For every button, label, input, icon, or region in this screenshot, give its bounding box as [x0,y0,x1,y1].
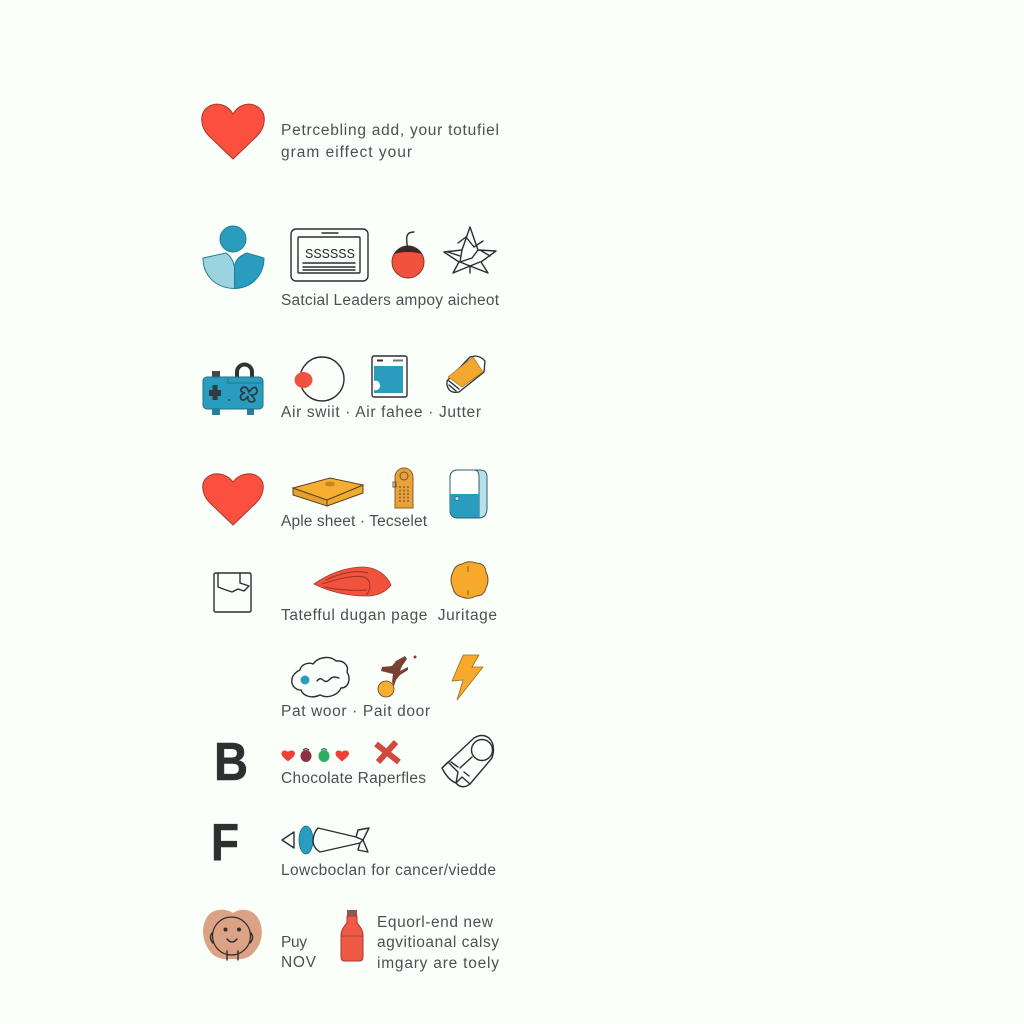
icon: circle with red dot [294,357,344,401]
caption: row 3: Air swiit · Air fahee · Jutter [281,404,481,421]
letter B: B [214,732,248,792]
caption: row 2: Satcial Leaders ampoy aicheot [281,292,500,309]
icon: orange tag [393,468,413,508]
icon: round ornament [392,232,424,278]
icon: outlined star [444,227,496,273]
letter F: F [211,814,239,872]
icon: blue window [372,356,407,397]
text block: Puy NOV: Puy [281,934,307,951]
icon: orange flat box [293,478,363,506]
row 3: game and air icons [203,356,485,421]
icon: orange cookie [451,562,488,598]
row 7: letter B and snack icons [214,732,493,792]
caption: row 6: Pat woor · Pait door [281,703,430,720]
icon: fish diagram [282,826,369,854]
icon: lightning bolt [452,655,483,700]
text block: Puy NOV: NOV [281,954,317,971]
icon: tablet: SSSSSS [305,247,355,263]
text block: closing description: imgary are toely [377,955,499,972]
row 5: page, leaf and cookie icons [214,562,497,624]
row 1: heart and text [202,104,499,161]
icon: red cross [376,742,399,762]
icon: cloud [292,657,349,697]
text block: closing description [377,914,499,972]
row 2: leader icons [203,226,500,309]
text block: row 1 description: Petrcebling add, your totufiel [281,122,499,139]
icon: row of small fruits [282,748,349,762]
text block: closing description: agvitioanal calsy [377,934,499,951]
icon: tablet [291,229,368,281]
icon: orange eraser [447,356,485,392]
icon: torn page [214,573,251,612]
row 6: cloud, note and bolt icons [281,655,483,720]
icon: red heart [202,104,264,159]
icon: person [203,226,264,288]
text block: row 1 description: gram eiffect your [281,144,412,161]
icon: red bottle [341,910,363,961]
caption: row 8: Lowcboclan for cancer/viedde [281,862,496,879]
icon: red heart [203,474,263,525]
caption: row 4: Aple sheet · Tecselet [281,513,428,530]
text block: Puy NOV [281,934,317,971]
icon: face [203,910,262,960]
row 4: heart and supply icons [203,468,487,530]
row 8: letter F and fish diagram [211,814,496,879]
icon: blue fridge [450,470,487,518]
icon: outlined capsule [442,736,493,787]
icon: game controller [203,365,263,415]
icon: red leaf [314,567,391,596]
text block: row 1 description [281,122,499,161]
text block: closing description: Equorl-end new [377,914,494,931]
icon: music note with bird [378,656,416,697]
row 9: face, bottle and text [203,910,499,972]
caption: row 7: Chocolate Raperfles [281,770,426,787]
caption: row 5: Tatefful dugan page Juritage [281,607,497,624]
